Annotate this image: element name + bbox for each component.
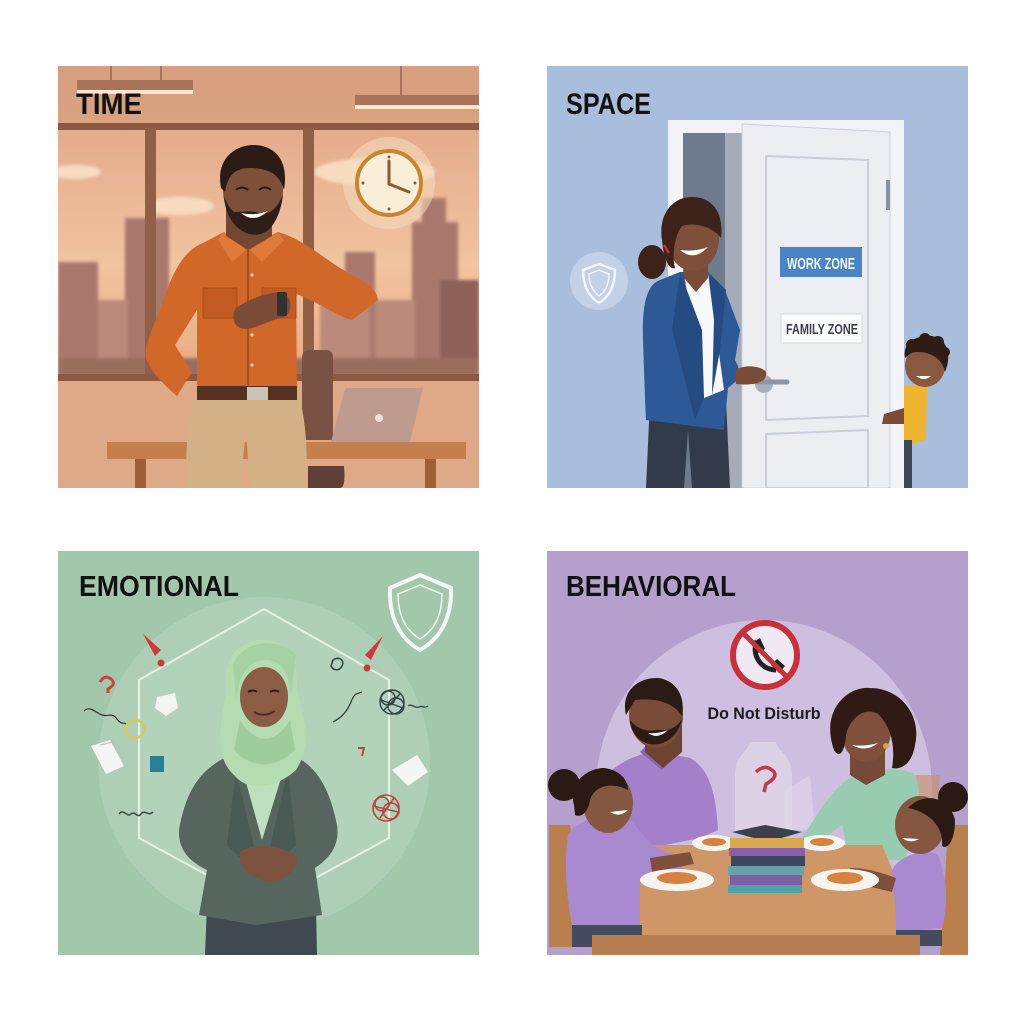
window with city skyline (49, 123, 479, 381)
dining table top (640, 845, 896, 935)
girl right (850, 782, 968, 946)
icon: clock (343, 137, 435, 229)
ceiling lights (77, 66, 479, 109)
sign: family zone (781, 314, 862, 343)
icon: large shield (390, 575, 451, 650)
girl left (548, 768, 694, 947)
sign: work zone: WORK ZONE (787, 256, 855, 273)
desk and laptop (107, 350, 466, 488)
panel: behavioral (547, 551, 968, 960)
heading: SPACE: SPACE (566, 88, 651, 121)
man with watch (146, 145, 378, 488)
panel: emotional (58, 551, 479, 955)
panel: space (547, 66, 968, 488)
father (612, 678, 718, 845)
plates of food (640, 835, 879, 891)
icon: no phone (733, 623, 797, 687)
mother (802, 688, 919, 860)
heading: BEHAVIORAL: BEHAVIORAL (566, 571, 736, 603)
sign: family zone: FAMILY ZONE (786, 321, 858, 338)
panel: time (49, 66, 479, 488)
hexagon barrier (139, 609, 389, 906)
chairs (549, 775, 968, 955)
stack of devices and books (728, 825, 805, 893)
sign: work zone (780, 247, 862, 277)
text: do not disturb: Do Not Disturb (708, 705, 820, 723)
heading: EMOTIONAL: EMOTIONAL (79, 571, 239, 603)
stress icons around barrier (84, 634, 428, 821)
woman in hijab (179, 640, 338, 955)
woman in blue blazer (638, 197, 766, 488)
dining table edge (592, 935, 920, 955)
question mark jar (735, 742, 815, 830)
door and frame (668, 120, 904, 488)
icon: shield (570, 252, 628, 310)
child peeking (882, 333, 950, 488)
heading: TIME: TIME (76, 88, 142, 121)
